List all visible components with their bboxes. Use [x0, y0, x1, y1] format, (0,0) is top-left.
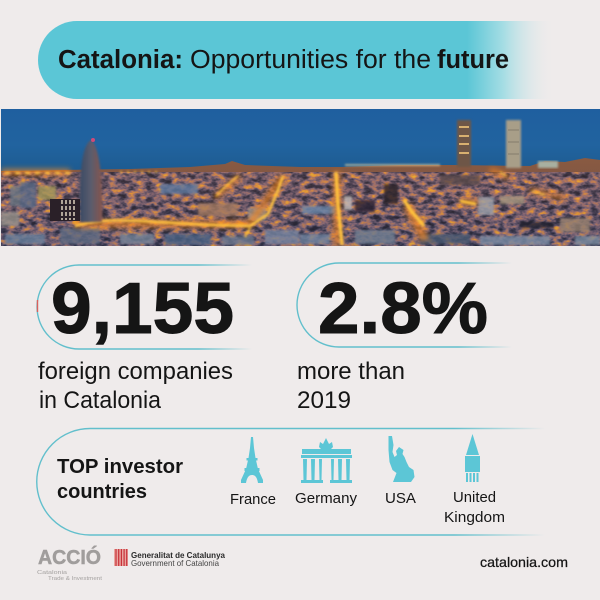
logo: ACCIÓ: Trade & Investment — [48, 576, 103, 582]
cool rooftops — [1, 175, 600, 245]
orange street glow — [1, 170, 565, 246]
label: United Kingdom: Kingdom — [444, 510, 505, 526]
pill outline — [37, 428, 545, 535]
bright seafront buildings — [538, 161, 558, 168]
caption: in Catalonia — [39, 387, 162, 414]
title text: future — [437, 46, 509, 74]
city texture — [1, 172, 600, 246]
city base — [1, 158, 600, 246]
title text: Opportunities for the — [190, 46, 431, 74]
sky and sea — [1, 109, 600, 175]
label: France: France — [230, 492, 276, 508]
icon: Big Ben — [465, 434, 480, 482]
panel: top investor countries — [37, 428, 545, 535]
icon: Statue of Liberty — [388, 436, 414, 482]
title text — [58, 46, 509, 74]
label: Germany: Germany — [295, 491, 358, 507]
caption — [297, 358, 405, 414]
flag emblem — [114, 549, 128, 566]
caption: more than — [297, 358, 405, 385]
logo: Generalitat de Catalunya: Government of Catalonia — [131, 558, 219, 568]
icon: Eiffel Tower — [241, 437, 263, 483]
caption: foreign companies — [38, 358, 233, 385]
website: catalonia.com — [480, 554, 568, 570]
title banner — [38, 21, 555, 99]
label: USA: USA — [385, 491, 416, 507]
number: 9,155 — [51, 269, 234, 349]
icon: Brandenburg Gate — [301, 438, 352, 483]
bright streets — [5, 165, 545, 245]
stat panel: foreign companies — [37, 265, 252, 414]
logo: ACCIÓ: Catalonia — [37, 570, 68, 576]
logo: ACCIÓ: ACCIÓ — [38, 545, 101, 569]
heading — [57, 456, 183, 503]
pill outline — [37, 265, 252, 349]
heading: TOP investor — [57, 456, 183, 478]
pill outline — [297, 263, 512, 347]
twin towers — [457, 120, 521, 168]
heading: countries — [57, 481, 147, 503]
title text: Catalonia: — [58, 46, 183, 74]
label: United Kingdom — [444, 490, 505, 526]
photo: Barcelona skyline at dusk — [1, 109, 600, 246]
red edge mark — [36, 300, 38, 312]
percentage: 2.8% — [318, 269, 488, 349]
stat panel: growth — [297, 263, 512, 414]
Torre Agbar tower — [80, 138, 102, 222]
caption: 2019 — [297, 387, 351, 414]
logo: Generalitat de Catalunya: Generalitat de Catalunya — [131, 550, 225, 560]
label: United Kingdom: United — [453, 490, 496, 506]
title pill — [38, 21, 555, 99]
logo: Generalitat de Catalunya — [114, 549, 225, 568]
footer — [37, 545, 568, 582]
dark striped building — [50, 199, 80, 221]
logo: ACCIÓ — [37, 545, 103, 582]
caption — [38, 358, 233, 414]
